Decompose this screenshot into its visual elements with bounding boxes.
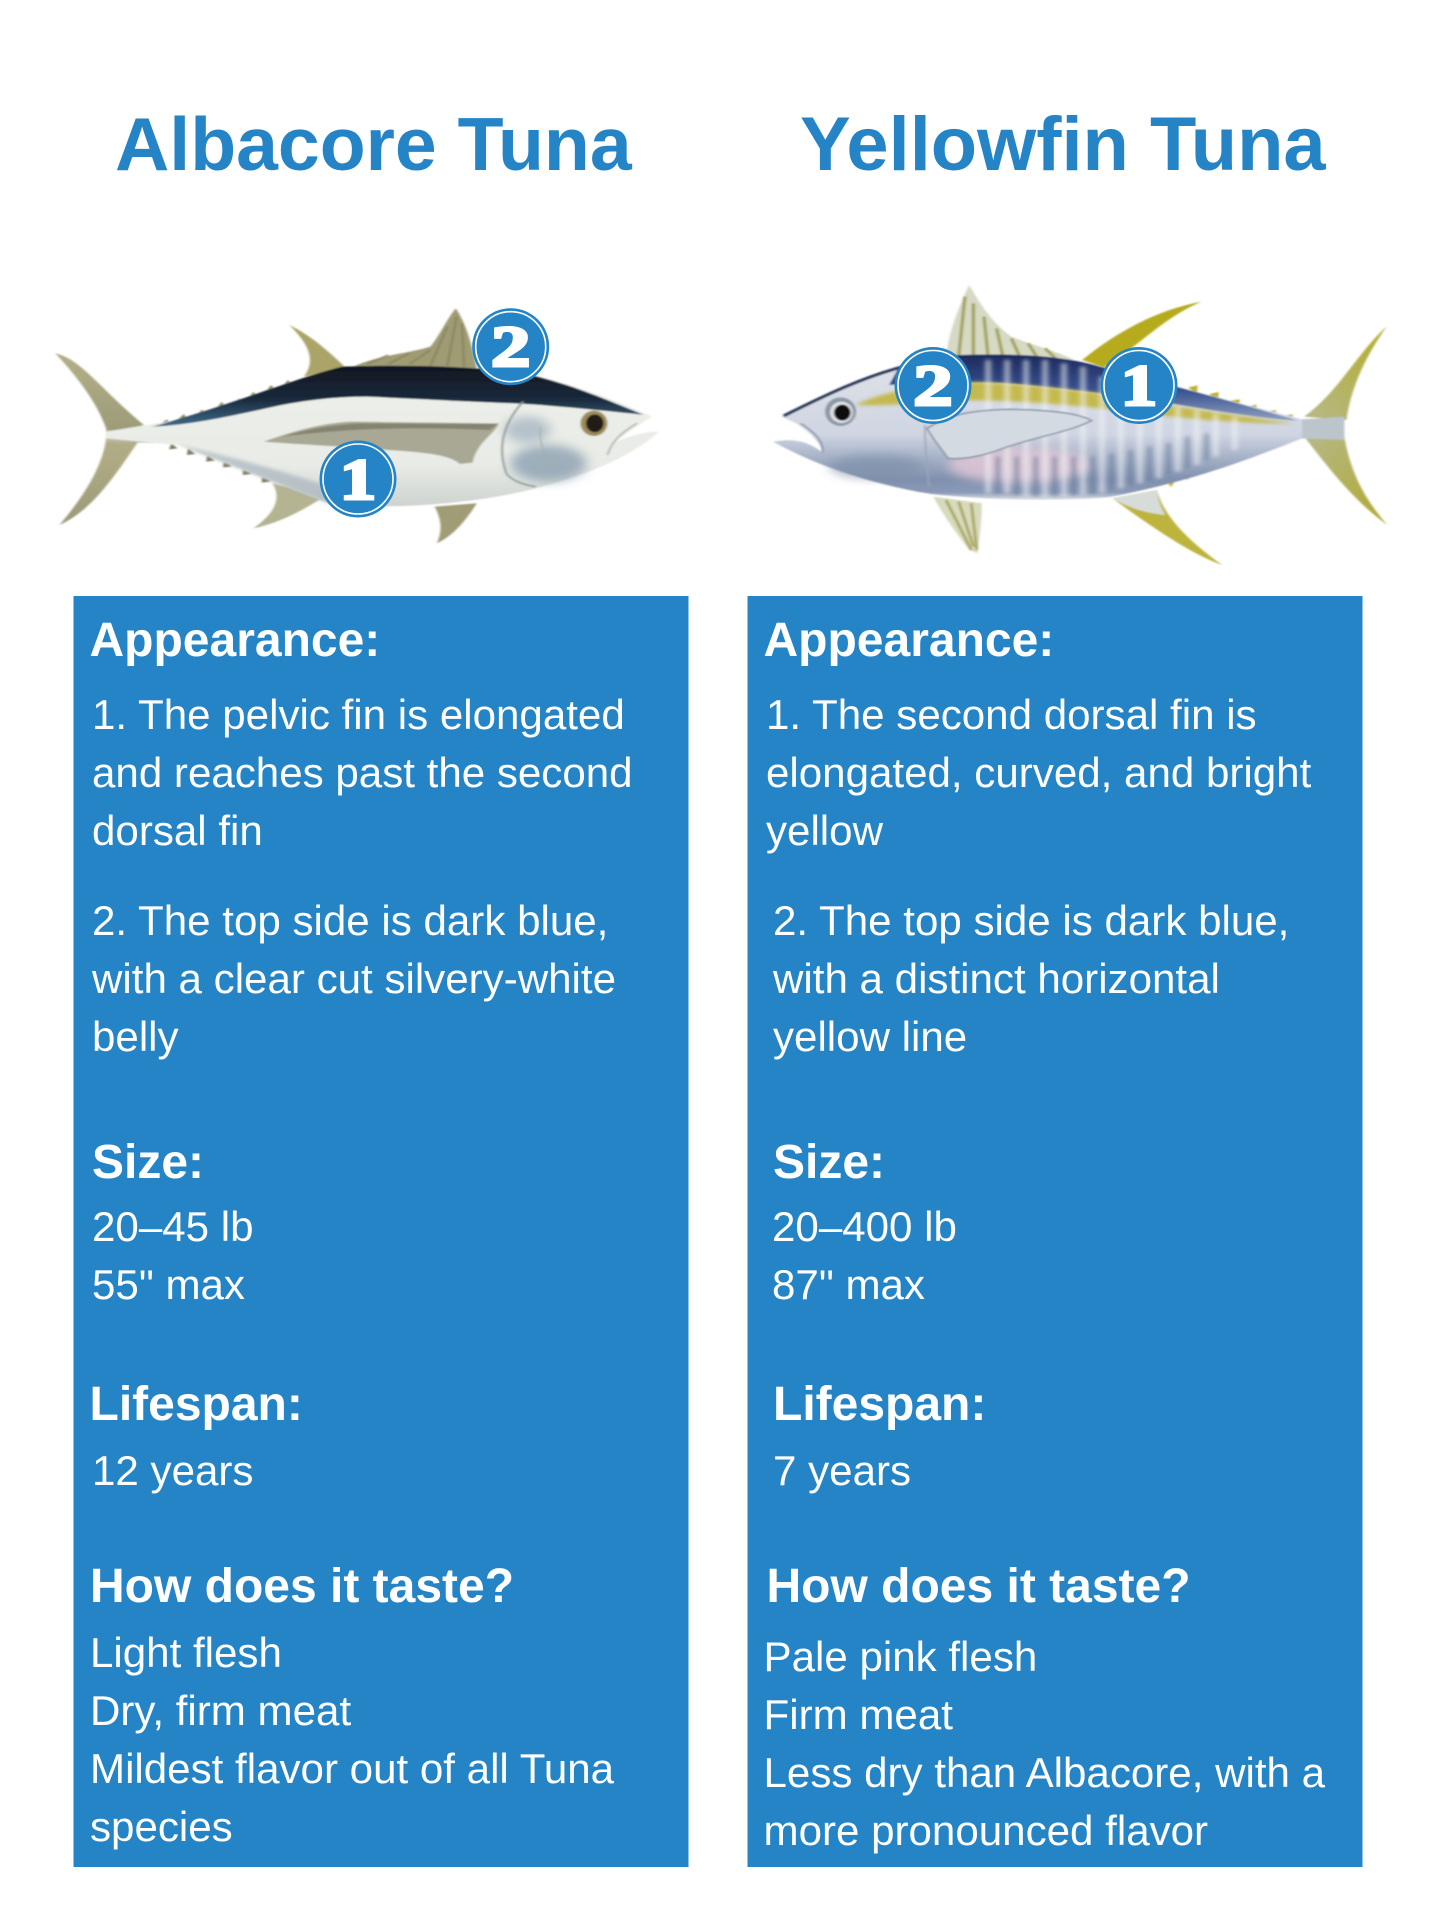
badge: yellowfin 1: 1	[1121, 354, 1157, 418]
text: size values	[772, 1203, 957, 1308]
pink belly wash	[948, 447, 1091, 483]
heading: taste: How does it taste?	[90, 1560, 514, 1613]
text: appearance point 2: 2. The top side is dark blue,	[773, 897, 1289, 944]
pectoral fin	[264, 422, 499, 464]
illustration: albacore tuna	[55, 308, 659, 543]
badge: yellowfin 2: 2	[913, 354, 953, 418]
text: appearance point 1	[92, 691, 633, 854]
text: taste notes: species	[90, 1803, 233, 1850]
text: lifespan value: 7 years	[773, 1447, 911, 1494]
text: appearance point 2: with a distinct horizontal	[772, 955, 1220, 1002]
text: size values: 87" max	[772, 1261, 925, 1308]
heading: size: Size:	[773, 1136, 885, 1189]
text: appearance point 2: with a clear cut silvery-white	[91, 955, 616, 1002]
heading: appearance: Appearance:	[764, 614, 1054, 667]
text: taste notes: Pale pink flesh	[764, 1633, 1037, 1680]
text: taste notes	[764, 1633, 1326, 1854]
vertical body stripes	[988, 360, 1235, 497]
text: taste notes	[90, 1629, 615, 1850]
peduncle	[1302, 417, 1344, 440]
blue back band	[889, 354, 1298, 421]
belly shading	[178, 445, 350, 505]
text: taste notes: Light flesh	[90, 1629, 282, 1676]
text: size values: 20–400 lb	[772, 1203, 957, 1250]
text: taste notes: Dry, firm meat	[90, 1687, 351, 1734]
eye	[825, 397, 856, 426]
badge: albacore 1: 1	[340, 448, 376, 512]
heading: appearance: Appearance:	[90, 614, 380, 667]
text: appearance point 1: elongated, curved, and bright	[766, 749, 1312, 796]
text: taste notes: more pronounced flavor	[764, 1807, 1208, 1854]
eye	[580, 411, 607, 436]
body	[773, 354, 1344, 500]
badge: yellowfin 2	[894, 347, 972, 424]
badge: albacore 2: 2	[491, 315, 530, 379]
text: taste notes: Less dry than Albacore, with a	[764, 1749, 1326, 1796]
dark back band	[152, 366, 643, 427]
text: appearance point 2: 2. The top side is dark blue,	[92, 897, 608, 944]
text: appearance point 2: yellow line	[773, 1013, 967, 1060]
text: appearance point 2: belly	[92, 1013, 179, 1060]
text: appearance point 1: 1. The pelvic fin is elongated	[92, 691, 625, 738]
panel: yellowfin facts	[748, 596, 1362, 1867]
heading: taste: How does it taste?	[766, 1560, 1191, 1613]
text: size values: 20–45 lb	[92, 1203, 254, 1250]
text: appearance point 1	[766, 691, 1312, 854]
illustration: yellowfin tuna	[773, 285, 1387, 565]
heading: lifespan: Lifespan:	[90, 1378, 303, 1431]
heading: lifespan: Lifespan:	[773, 1378, 986, 1431]
text: appearance point 2	[772, 897, 1289, 1060]
heading: size: Size:	[92, 1136, 204, 1189]
text: lifespan value: 12 years	[92, 1447, 253, 1494]
head shading	[830, 455, 923, 478]
text: size values	[92, 1203, 254, 1308]
text: appearance point 1: yellow	[766, 807, 884, 854]
head top line	[784, 366, 906, 416]
text: taste notes: Firm meat	[764, 1691, 953, 1738]
badge: albacore 2	[472, 308, 549, 385]
text: appearance point 1: 1. The second dorsal fin is	[766, 691, 1257, 738]
badge: albacore 1	[320, 440, 396, 518]
title: Yellowfin Tuna: Yellowfin Tuna	[800, 102, 1326, 187]
text: appearance point 1: and reaches past the second	[92, 749, 633, 796]
yellow stripe	[855, 382, 1294, 423]
badge: yellowfin 1	[1100, 347, 1178, 424]
head shading	[511, 445, 586, 482]
panel: albacore facts	[74, 596, 688, 1867]
text: size values: 55" max	[92, 1261, 245, 1308]
pectoral fin	[927, 409, 1091, 459]
title: Albacore Tuna: Albacore Tuna	[115, 102, 633, 186]
text: appearance point 1: dorsal fin	[92, 807, 263, 854]
text: appearance point 2	[91, 897, 616, 1060]
body	[106, 366, 659, 506]
text: taste notes: Mildest flavor out of all Tuna	[90, 1745, 615, 1792]
